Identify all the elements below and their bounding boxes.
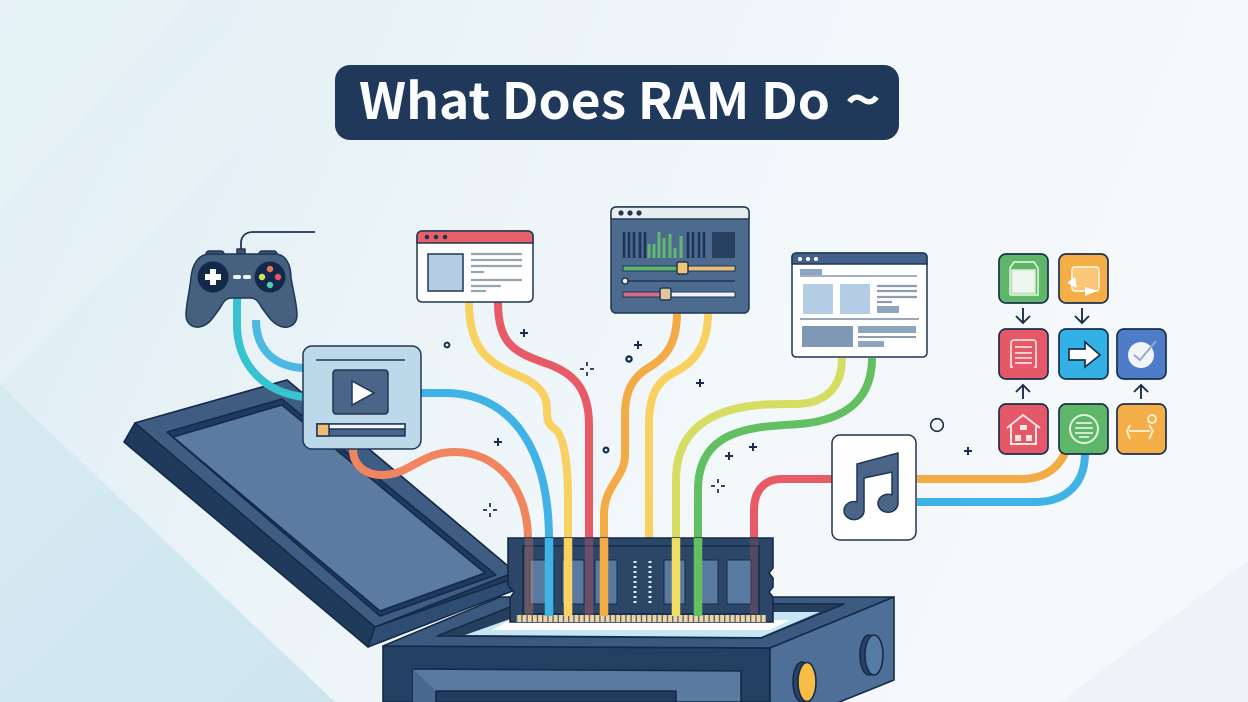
icon grid arrows <box>1016 308 1148 399</box>
icon tile: orange chat <box>1059 254 1108 303</box>
RAM module <box>508 538 773 622</box>
browser window: red header <box>417 231 533 302</box>
open lid panel <box>124 380 515 647</box>
audio editor window <box>611 207 749 313</box>
cable: green <box>698 358 872 615</box>
cable: blue from music <box>917 453 1085 502</box>
computer case <box>383 597 894 702</box>
icon tile: green list <box>1059 404 1108 454</box>
sparkles and dots <box>445 329 972 517</box>
cable: lime <box>676 358 842 615</box>
cable: blue from controller <box>256 320 304 368</box>
icon tile: blue arrow <box>1059 329 1108 379</box>
cable: blue from video <box>421 393 549 615</box>
video player card <box>303 346 421 449</box>
cable: yellow <box>469 302 568 615</box>
icon tile: indigo check <box>1117 329 1166 379</box>
cable tips over RAM <box>545 538 553 616</box>
icon tile: red document <box>999 329 1048 379</box>
cable: salmon from video <box>353 449 528 540</box>
cable: orange <box>604 313 677 610</box>
icon: music card <box>832 435 916 540</box>
icon: game controller <box>186 232 315 327</box>
cable: red to music <box>754 479 832 538</box>
icon tile: green box <box>999 254 1048 303</box>
icon tile: orange route <box>1117 404 1166 454</box>
cable: teal from controller <box>237 298 304 397</box>
title: ~ <box>845 59 881 134</box>
icon tile: red house <box>999 404 1048 454</box>
title: What Does RAM Do <box>359 62 830 134</box>
browser window: web page <box>792 253 927 357</box>
cable: pale yellow <box>649 313 708 538</box>
cables <box>237 298 1085 615</box>
cable: orange from music <box>917 453 1065 479</box>
cable: red <box>498 302 589 610</box>
app icon grid <box>999 254 1166 454</box>
